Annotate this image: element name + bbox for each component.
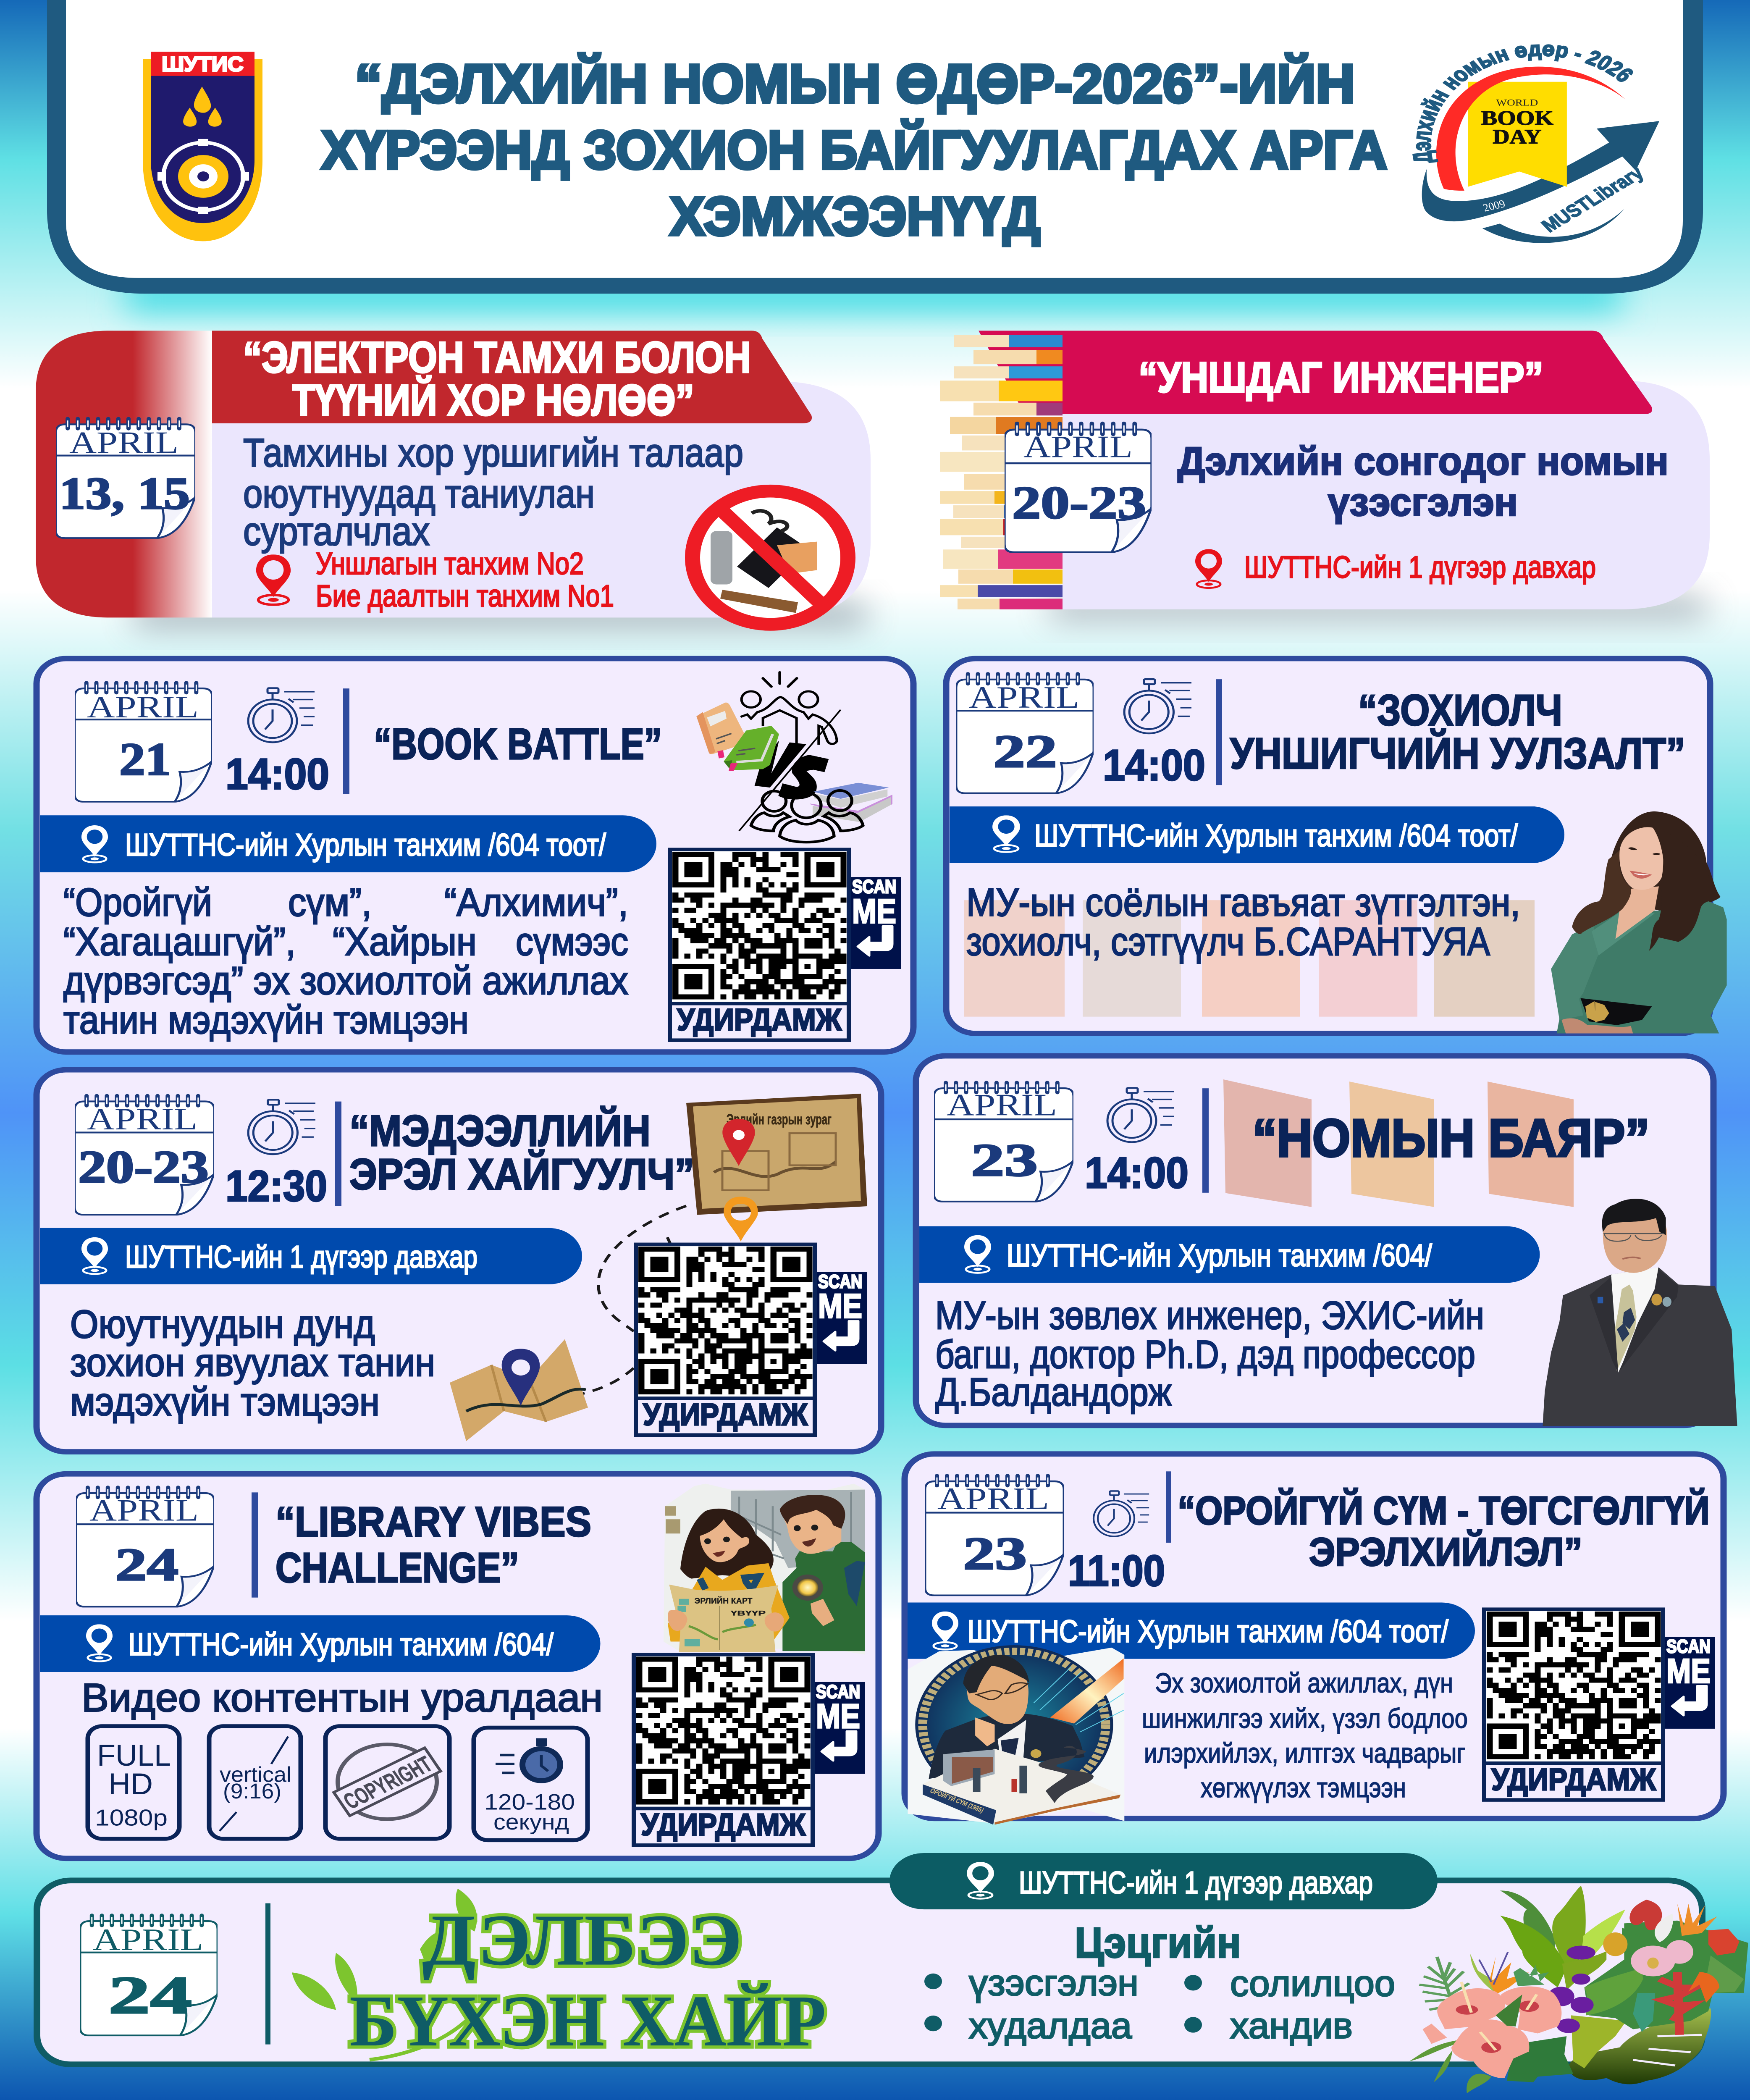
logo: university shield <box>143 52 262 241</box>
badge: full HD: 1080p <box>95 1805 168 1831</box>
calendar: April 21 <box>75 683 212 802</box>
icon: location pin <box>81 825 108 862</box>
description: багш, доктор Ph.D, дэд профессор <box>935 1333 1475 1376</box>
location bar: ШУТТНС-ийн Хурлын танхим /604 тоот/ <box>968 1614 1448 1649</box>
description <box>1178 439 1669 524</box>
book stack <box>940 335 1063 609</box>
description: сүмээс <box>516 920 628 963</box>
icon: location pin <box>86 1624 113 1662</box>
panel: Book Battle <box>37 659 913 1052</box>
heading <box>349 1106 694 1198</box>
QR code with scan label <box>634 1243 867 1437</box>
icon: stopwatch <box>1094 1491 1149 1536</box>
header panel <box>47 0 1703 294</box>
calendar: April 23: APRIL <box>937 1481 1049 1516</box>
calendar: April 24: APRIL <box>89 1493 199 1528</box>
QR code with scan label: УДИРДАМЖ <box>1491 1762 1656 1796</box>
faded books <box>1223 1079 1574 1207</box>
time: 11:00 <box>1068 1546 1165 1595</box>
icon: location pin <box>967 1862 994 1899</box>
description: Тамхины хор уршигийн талаар <box>243 431 743 475</box>
location bar <box>950 806 1564 863</box>
icon: location pin <box>932 1612 958 1649</box>
faded book covers <box>964 900 1535 1017</box>
calendar: April 20-23: 20-23 <box>78 1142 209 1193</box>
description <box>243 431 743 554</box>
location text <box>316 546 614 613</box>
QR code with scan label: SCAN <box>818 1271 862 1292</box>
logo: world book day badge: 2009 <box>1481 198 1507 214</box>
location text: Бие даалтын танхим No1 <box>316 579 614 613</box>
calendar: April 22 <box>956 674 1094 793</box>
panel: endless quest <box>905 1454 1724 1824</box>
description: хөгжүүлэх тэмцээн <box>1201 1772 1406 1803</box>
icon: folded map with pin <box>450 1339 588 1441</box>
icon: books versus people <box>696 672 892 842</box>
QR code with scan label <box>632 1653 865 1847</box>
location bar <box>908 1603 1475 1659</box>
logo: world book day badge: BOOK <box>1481 107 1553 129</box>
QR code with scan label: SCAN <box>1666 1636 1711 1657</box>
calendar: April 23: 23 <box>971 1135 1038 1186</box>
description <box>63 880 628 1042</box>
time: 14:00 <box>1085 1149 1189 1197</box>
QR code with scan label: УДИРДАМЖ <box>677 1003 842 1037</box>
illustration: author with open book: ОРОЙГҮЙ СҮМ (1985) <box>929 1786 986 1814</box>
calendar: April 22: APRIL <box>969 680 1079 715</box>
calendar: April 13, 15 <box>56 419 195 538</box>
calendar: April 21: APRIL <box>87 689 199 724</box>
heading: CHALLENGE” <box>275 1545 519 1591</box>
description: оюутнуудад таниулан <box>243 472 595 516</box>
calendar: April 13, 15: 13, 15 <box>59 468 190 519</box>
location bar: ШУТТНС-ийн 1 дүгээр давхар <box>125 1239 478 1274</box>
icon: red location pin <box>1195 549 1222 588</box>
description: “Хагацашгүй”, <box>63 920 296 963</box>
description: зохиолч, сэтгүүлч Б.САРАНТУЯА <box>966 920 1490 963</box>
heading: ЭРЭЛХИЙЛЭЛ” <box>1309 1529 1582 1574</box>
heading <box>1178 1488 1710 1574</box>
activities: хандив <box>1230 2006 1353 2046</box>
description <box>1142 1668 1468 1803</box>
calendar: April 23 <box>934 1083 1073 1202</box>
description: “Оройгүй <box>63 880 212 924</box>
heading: “ЗОХИОЛЧ <box>1358 686 1562 735</box>
logo: university shield: ШУТИС <box>162 53 244 76</box>
icon: location pin <box>992 815 1020 852</box>
heading: “BOOK BATTLE” <box>374 720 662 768</box>
panel: book celebration <box>916 1056 1737 1426</box>
calendar: April 20-23 <box>75 1096 214 1215</box>
title <box>321 53 1387 247</box>
calendar: April 24: 24 <box>115 1539 178 1591</box>
QR code with scan label: ME <box>1666 1651 1711 1690</box>
title: ХҮРЭЭНД ЗОХИОН БАЙГУУЛАГДАХ АРГА <box>321 119 1387 180</box>
badge: vertical ratio <box>209 1726 301 1839</box>
panel: flower festival <box>37 1853 1748 2093</box>
heading: “НОМЫН БАЯР” <box>1252 1108 1650 1168</box>
badge: vertical ratio: (9:16) <box>223 1779 281 1803</box>
heading: “LIBRARY VIBES <box>275 1499 591 1546</box>
QR code with scan label: ME <box>818 1287 862 1325</box>
description <box>935 1294 1484 1414</box>
location text: ШУТТНС-ийн 1 дүгээр давхар <box>1244 550 1596 584</box>
icon: stopwatch <box>1107 1088 1174 1142</box>
description: МУ-ын зөвлөх инженер, ЭХИС-ийн <box>935 1294 1484 1337</box>
icon: stopwatch <box>1124 679 1191 733</box>
location bar <box>40 1228 582 1284</box>
icon: stopwatch <box>248 688 315 742</box>
badge: duration <box>474 1727 588 1840</box>
calendar: April 20-23: APRIL <box>87 1101 197 1136</box>
portrait: man <box>1543 1199 1737 1426</box>
calendar: April 24: 24 <box>108 1966 192 2025</box>
description: дүрвэгсэд” эх зохиолтой ажиллах <box>63 959 628 1003</box>
heading <box>243 333 751 424</box>
description: мэдэхүйн тэмцээн <box>70 1380 380 1423</box>
subheading: Видео контентын уралдаан <box>81 1675 603 1720</box>
illustration: children with map <box>664 1483 865 1655</box>
calendar: April 23 <box>925 1475 1064 1596</box>
description <box>70 1302 435 1423</box>
description: Оюутнуудын дунд <box>70 1302 375 1346</box>
illustration: children with map: ЭРЛИЙН КАРТ <box>694 1596 753 1606</box>
location bar <box>919 1226 1540 1283</box>
heading: ТҮҮНИЙ ХОР НӨЛӨӨ” <box>292 375 694 424</box>
location bar: ШУТТНС-ийн Хурлын танхим /604/ <box>1007 1238 1432 1273</box>
activities: үзэсгэлэн <box>969 1963 1139 2003</box>
icon: red location pin <box>256 554 291 605</box>
illustration: tropical flowers <box>1409 1886 1748 2093</box>
time: 12:30 <box>226 1162 327 1210</box>
panel: library vibes challenge <box>37 1474 879 1858</box>
icon: treasure map book <box>686 1094 867 1215</box>
panel: e-cigarette event <box>36 331 871 631</box>
activities <box>924 1919 1395 2046</box>
location pill <box>889 1853 1438 1909</box>
logo: world book day badge: MUSTLibrary <box>1537 163 1648 236</box>
description <box>966 880 1520 963</box>
badge: duration: секунд <box>493 1810 569 1835</box>
illustration: children with map: ҮВҮҮР <box>731 1609 766 1617</box>
panel: author-reader meeting <box>946 659 1727 1034</box>
badge: copyright stamp <box>325 1726 449 1839</box>
logo: world book day badge: Дэлхийн номын өдөр - 2026 <box>1407 37 1639 165</box>
badge: duration: 120-180 <box>484 1790 575 1814</box>
heading: ЭРЭЛ ХАЙГУУЛЧ” <box>349 1150 694 1198</box>
calendar: April 23: 23 <box>963 1528 1027 1579</box>
description: Эх зохиолтой ажиллах, дүн <box>1155 1668 1453 1698</box>
calendar: April 24 <box>80 1915 218 2035</box>
dashed route <box>559 1206 686 1399</box>
logo: world book day badge: DAY <box>1493 125 1541 148</box>
activities: Цэцгийн <box>1075 1919 1241 1967</box>
QR code with scan label: ME <box>852 892 896 930</box>
calendar: April 20-23 <box>1005 423 1152 552</box>
logo: world book day badge <box>1407 37 1659 243</box>
event title: БҮХЭН ХАЙР <box>349 1981 826 2062</box>
icon: location pin <box>81 1237 108 1274</box>
badge: full HD: HD <box>108 1767 153 1801</box>
calendar: April 23: APRIL <box>947 1087 1057 1122</box>
description: “Алхимич”, <box>444 880 628 924</box>
activities: худалдаа <box>969 2006 1132 2046</box>
badge: full HD <box>88 1726 179 1839</box>
illustration: author with open book <box>908 1645 1124 1824</box>
description: “Хайрын <box>333 920 477 963</box>
event title <box>349 1900 826 2062</box>
QR code with scan label: SCAN <box>816 1682 860 1702</box>
badge: copyright stamp: COPYRIGHT <box>339 1752 437 1814</box>
heading <box>1230 686 1685 777</box>
description: МУ-ын соёлын гавъяат зүтгэлтэн, <box>966 880 1520 924</box>
calendar: April 20-23: APRIL <box>1023 429 1133 464</box>
location bar <box>40 1615 601 1672</box>
heading: “ЭЛЕКТРОН ТАМХИ БОЛОН <box>243 333 751 382</box>
icon: green leaves <box>292 1889 477 2060</box>
description: Дэлхийн сонгодог номын <box>1178 439 1669 483</box>
title: ХЭМЖЭЭНҮҮД <box>670 186 1040 247</box>
time: 14:00 <box>226 750 329 798</box>
location bar: ШУТТНС-ийн Хурлын танхим /604 тоот/ <box>1034 818 1518 853</box>
calendar: April 24 <box>76 1487 214 1607</box>
description: Д.Балдандорж <box>935 1370 1172 1414</box>
heading <box>275 1499 591 1591</box>
description: танин мэдэхүйн тэмцээн <box>63 998 469 1042</box>
description: илэрхийлэх, илтгэх чадварыг <box>1144 1738 1465 1769</box>
icon: stopwatch <box>248 1100 315 1154</box>
heading: “УНШДАГ ИНЖЕНЕР” <box>1139 353 1543 401</box>
badge: full HD: FULL <box>97 1738 171 1772</box>
logo: world book day badge: WORLD <box>1496 98 1538 108</box>
QR code with scan label: SCAN <box>852 877 896 897</box>
panel: information treasure hunt <box>37 1070 881 1452</box>
icon: orange pin <box>724 1197 758 1242</box>
description: үзэсгэлэн <box>1328 480 1518 524</box>
QR code with scan label: УДИРДАМЖ <box>641 1808 806 1842</box>
calendar: April 13, 15: APRIL <box>69 425 178 460</box>
calendar: April 20-23: 20-23 <box>1012 478 1146 528</box>
location bar: ШУТТНС-ийн Хурлын танхим /604/ <box>129 1627 554 1662</box>
location bar: ШУТТНС-ийн Хурлын танхим /604 тоот/ <box>125 827 606 863</box>
location pill: ШУТТНС-ийн 1 дүгээр давхар <box>1019 1865 1373 1900</box>
QR code with scan label: ME <box>816 1697 860 1735</box>
event title: ДЭЛБЭЭ <box>422 1900 742 1981</box>
badge: vertical ratio: vertical <box>220 1763 291 1786</box>
portrait: woman <box>1551 811 1727 1033</box>
heading: “МЭДЭЭЛЛИЙН <box>349 1106 651 1155</box>
description: сурталчлах <box>243 509 430 554</box>
icon: no smoking <box>693 491 848 625</box>
description: зохион явуулах танин <box>70 1341 435 1384</box>
QR code with scan label <box>1482 1607 1715 1802</box>
title: “ДЭЛХИЙН НОМЫН ӨДӨР-2026”-ИЙН <box>355 53 1355 114</box>
QR code with scan label <box>668 848 901 1042</box>
activities: солилцоо <box>1230 1963 1395 2004</box>
description: сүм”, <box>288 880 372 924</box>
description: шинжилгээ хийх, үзэл бодлоо <box>1142 1704 1468 1734</box>
calendar: April 22: 22 <box>993 726 1057 777</box>
time: 14:00 <box>1103 741 1205 789</box>
icon: treasure map book: Эрлийн газрын зураг <box>727 1111 832 1128</box>
location bar <box>40 815 656 872</box>
calendar: April 24: APRIL <box>93 1922 203 1957</box>
calendar: April 21: 21 <box>119 734 171 785</box>
QR code with scan label: УДИРДАМЖ <box>643 1397 808 1432</box>
icon: location pin <box>964 1235 991 1273</box>
panel: reading engineer event <box>940 331 1710 624</box>
location text: Уншлагын танхим No2 <box>316 546 584 580</box>
